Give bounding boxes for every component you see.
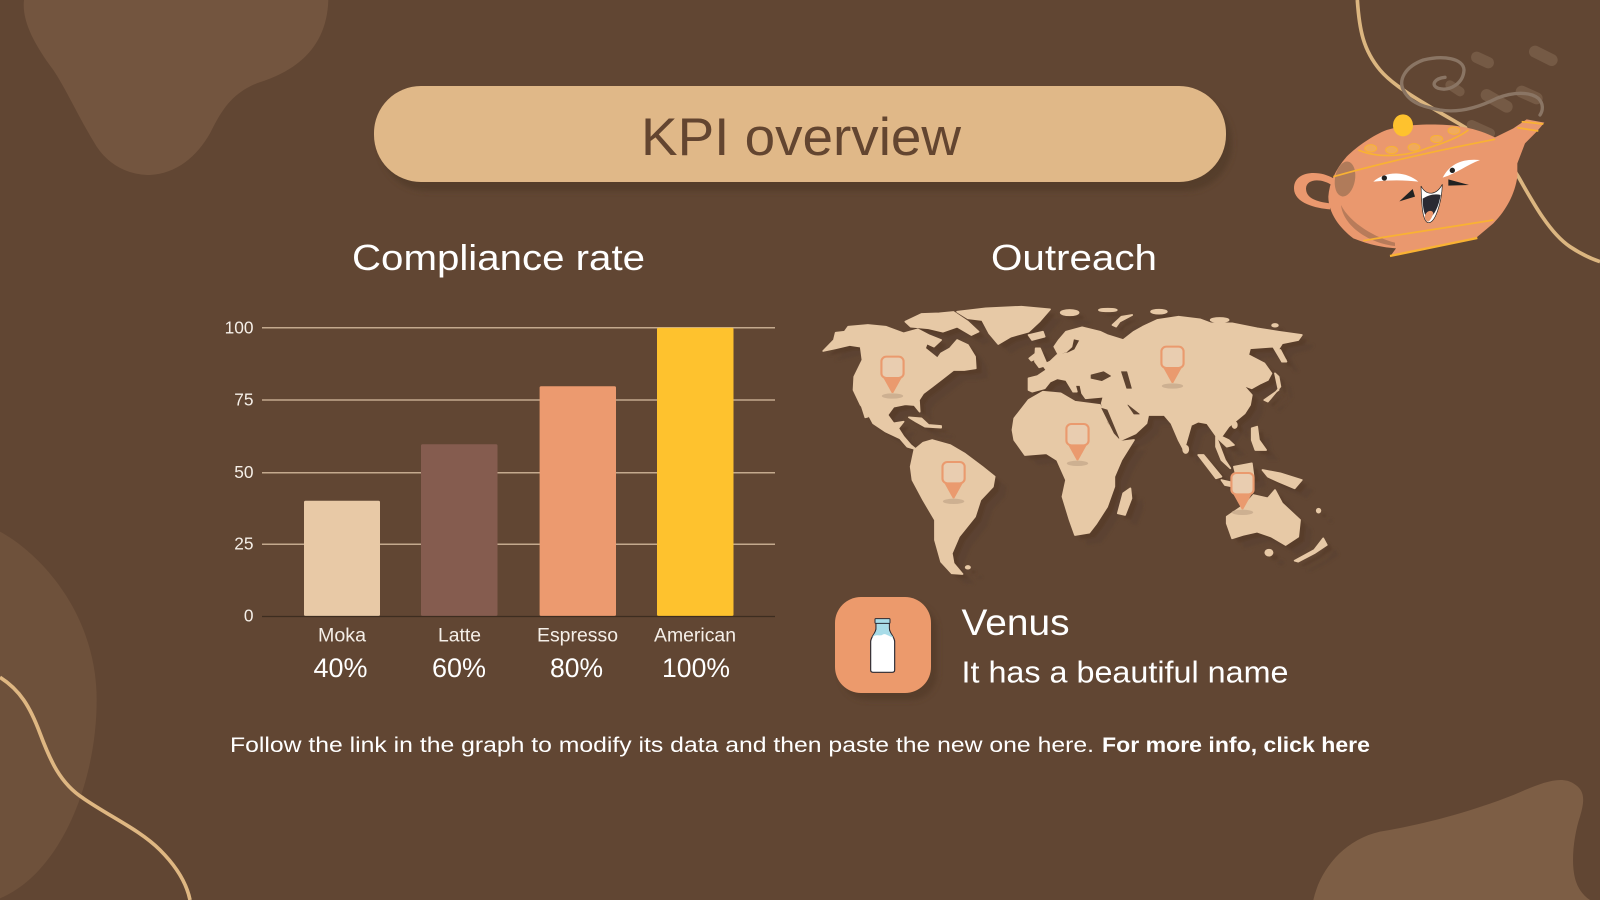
continents — [823, 307, 1327, 574]
pin: North America — [881, 357, 904, 399]
knob — [1393, 114, 1413, 136]
title pill shadow — [380, 95, 1232, 191]
y axis labels: 25 — [234, 534, 254, 554]
bar chart — [225, 318, 775, 683]
y axis labels: 50 — [234, 462, 254, 482]
category labels: American — [654, 626, 736, 646]
category labels: Moka — [318, 626, 366, 646]
percentage labels: 80% — [550, 653, 603, 683]
curve: bottom left — [0, 677, 190, 900]
percentage labels: 100% — [662, 653, 730, 683]
bar: Latte — [421, 444, 498, 616]
inland seas — [1091, 372, 1139, 438]
bar: American — [657, 328, 734, 616]
pin: South America — [942, 462, 965, 504]
y axis labels: 0 — [244, 606, 254, 626]
blob: bottom right — [1313, 780, 1590, 900]
percentage labels — [314, 653, 730, 683]
body — [1328, 119, 1544, 257]
pin: Oceania — [1231, 473, 1254, 515]
bar: Espresso — [540, 386, 616, 616]
illustration: teapot — [1294, 52, 1552, 257]
heading: compliance rate: Compliance rate — [352, 237, 645, 278]
face — [1373, 174, 1418, 182]
category labels: Latte — [438, 626, 481, 646]
decorative bands — [1333, 122, 1543, 256]
pin: Asia — [1161, 347, 1184, 389]
y axis labels: 75 — [234, 390, 254, 410]
icon tile shadow — [841, 604, 937, 700]
heading: outreach: Outreach — [991, 237, 1157, 278]
title: KPI overview — [641, 108, 962, 167]
category labels: Espresso — [537, 626, 618, 646]
footnote — [230, 733, 1370, 757]
text block: Venus: It has a beautiful name — [962, 654, 1288, 690]
pin: Africa — [1066, 424, 1089, 466]
footnote: For more info, click here — [1102, 733, 1370, 757]
footnote: Follow the link in the graph to modify its data and then paste the new one here. — [230, 733, 1094, 757]
bar: Moka — [304, 501, 380, 616]
icon: milk bottle — [835, 597, 931, 693]
handle — [1294, 173, 1333, 209]
curve: top right — [1357, 0, 1600, 262]
gridlines — [262, 328, 775, 544]
text block: Venus: Venus — [962, 602, 1070, 643]
text block: Venus — [962, 602, 1288, 690]
shading — [1332, 160, 1358, 198]
blob: bottom left — [0, 532, 97, 898]
world map — [823, 307, 1339, 584]
map shadow — [829, 311, 1339, 584]
category labels — [318, 626, 736, 646]
steam — [1402, 52, 1552, 133]
y axis labels: 100 — [225, 318, 254, 338]
blob: top left — [24, 0, 328, 175]
percentage labels: 60% — [432, 653, 486, 683]
y axis labels — [225, 318, 254, 626]
title — [374, 86, 1226, 182]
percentage labels: 40% — [314, 653, 368, 683]
